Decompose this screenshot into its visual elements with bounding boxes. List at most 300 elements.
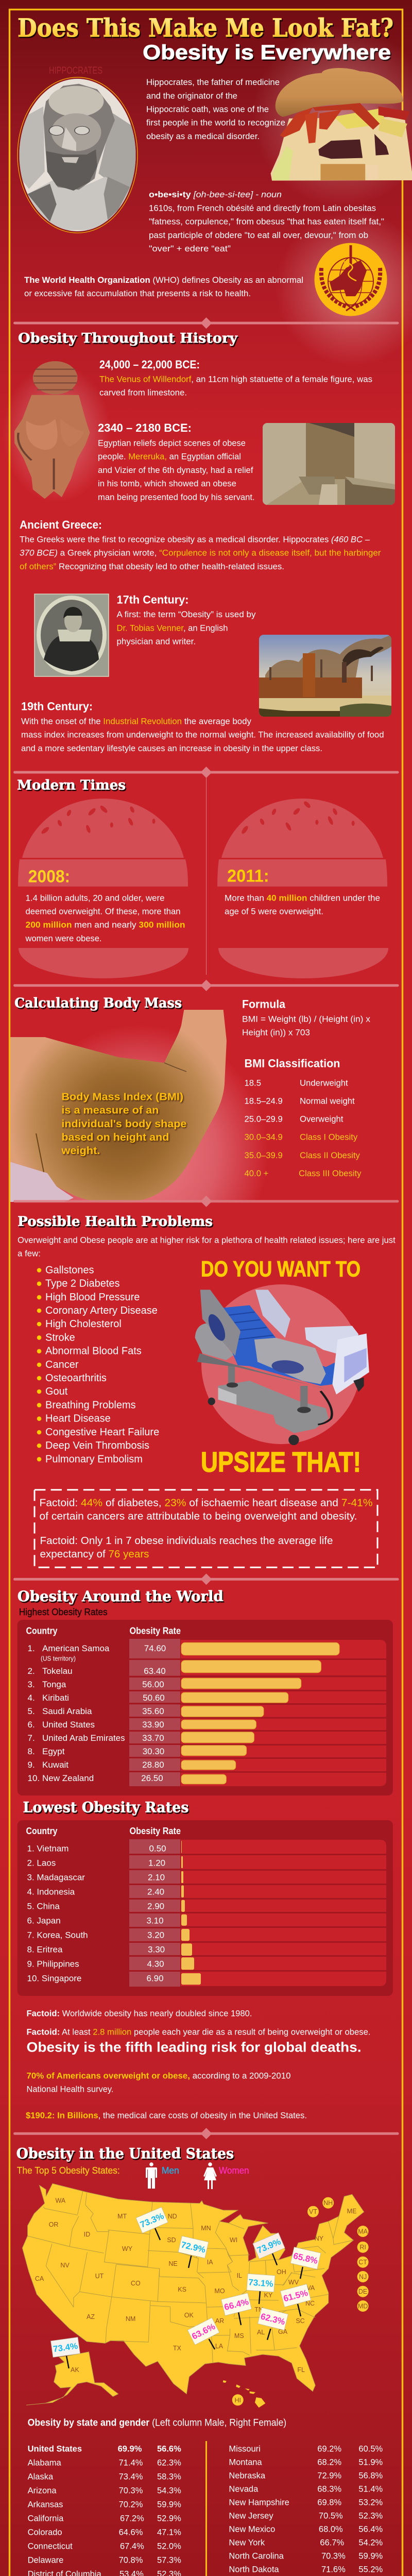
small state circles: CT [358,2259,367,2266]
subtitle: Obesity is Everywhere [143,41,391,64]
table: states Alabama to Mississippi: United States [28,2445,82,2454]
table: states Missouri to Puerto Rico: 53.2% [358,2498,383,2507]
state labels: AR [215,2317,224,2325]
row: New Zealand: 10. [28,1773,40,1783]
entry: 2340 – 2180 BCE: in his tomb, which showed an obese [98,479,236,488]
section: Obesity in the United States [16,2145,387,2576]
small state circles: RI [359,2244,366,2251]
image: loaded burger [271,68,412,181]
intro text: Hippocratic oath, was one of the [146,104,269,114]
row: Tonga: 56.00 [142,1680,164,1689]
state labels: AZ [87,2313,95,2320]
state labels: TN [254,2306,263,2313]
chart: highest obesity rates: Country [26,1626,58,1636]
entry: 17th Century: physician and writer. [116,637,196,647]
table: states Missouri to Puerto Rico: 54.2% [358,2538,383,2548]
row: Kiribati: 50.60 [143,1693,165,1703]
state labels: WV [288,2279,299,2286]
image: industrial revolution factory [259,635,391,717]
entry: 24,000 – 22,000 BCE: carved from limestone. [99,387,187,397]
state labels: IA [207,2259,213,2266]
row: New Zealand: 26.50 [141,1773,163,1783]
sign: Ohio 73.9%: 73.9% [255,2236,282,2256]
image: Venus of Willendorf statuette [14,361,90,499]
row: American Samoa: American Samoa [42,1643,110,1653]
row: Tokelau: 2. [28,1666,35,1676]
table: states Alabama to Mississippi: 70.8% [119,2556,143,2565]
sign: Louisiana 63.6%: 63.6% [190,2321,217,2342]
table: states Missouri to Puerto Rico: 59.9% [358,2552,383,2561]
sign: Mississippi 66.4%: 66.4% [223,2297,250,2312]
row: Philippines: 9. Philippines [27,1959,79,1969]
header [18,13,393,64]
panel: 2011 burger: More than 40 million children under the [225,893,380,903]
row: New Zealand [28,1772,386,1786]
entry: 19th Century [21,700,384,753]
list of health problems: High Blood Pressure [45,1292,140,1303]
table: states Alabama to Mississippi: 67.2% [120,2514,144,2523]
state labels: IL [237,2272,242,2279]
table: states Alabama to Mississippi: 47.1% [157,2528,181,2537]
small state circles: MD [358,2303,368,2310]
BMI classification table: 40.0 + [244,1168,268,1178]
factoids: Obesity is the fifth leading risk for global deaths. [27,2040,362,2055]
state labels: OK [184,2312,194,2319]
row: United States: 33.90 [142,1720,164,1730]
row: American Samoa: 1. [28,1643,35,1653]
row: American Samoa: 74.60 [144,1643,166,1653]
row: Egypt [28,1745,386,1757]
list of health problems: Type 2 Diabetes [45,1278,120,1290]
row: Madagascar: 3. Madagascar [27,1872,85,1882]
entry: Ancient Greece: 370 BCE) a Greek physician wrote, “Corpulence is not only a disease itself, but the harbinger [20,548,381,558]
table: states Missouri to Puerto Rico: 68.2% [317,2458,341,2467]
table: states Alabama to Mississippi: 70.3% [119,2486,143,2496]
intro text: Hippocrates, the father of medicine [146,77,280,87]
callout: Do you want to upsize that: DO YOU WANT TO [201,1257,360,1282]
heading: obesity by state and gender: Obesity by state and gender (Left column Male, Right Female) [28,2417,286,2428]
sign: South Carolina 61.5%: 61.5% [282,2288,309,2303]
section: Obesity Throughout History [3,331,395,753]
state labels: WY [122,2245,133,2252]
row: Singapore: 6.90 [146,1973,164,1983]
panel: 2008 burger [18,799,188,978]
row: Philippines [27,1957,386,1970]
intro text: and the originator of the [146,91,237,100]
small state circles: DE [358,2288,367,2295]
row: Korea, South: 7. Korea, South [27,1930,88,1940]
state labels: SC [296,2317,305,2325]
BMI classification table: Class III Obesity [299,1168,362,1178]
state labels: OR [49,2221,58,2228]
sign: North Dakota 73.3% [136,2207,168,2240]
table: states Missouri to Puerto Rico: Montana [229,2458,262,2467]
small state circles [232,2197,369,2405]
row: Vietnam: 0.50 [149,1843,166,1853]
state labels [35,2197,356,2374]
table: states Alabama to Mississippi: Alaska [28,2472,54,2482]
state labels: CA [35,2275,44,2282]
row: Korea, South [27,1928,386,1941]
BMI description: is a measure of an [61,1105,159,1116]
table: states Alabama to Mississippi: 71.4% [119,2459,143,2468]
BMI classification table: Class I Obesity [300,1132,358,1142]
heading: Modern Times [17,778,126,793]
callout: Do you want to upsize that: UPSIZE THAT! [201,1446,361,1478]
glow behind WHO emblem [276,211,412,366]
panel: 2008 burger: women were obese. [25,934,101,943]
formula: Formula [242,998,286,1011]
list of health problems: Deep Vein Thrombosis [45,1440,149,1451]
definition of obesity: "fatness, corpulence," from obesus "that has eaten itself fat," [149,217,384,227]
table: states Missouri to Puerto Rico: Nebraska [229,2471,266,2481]
table: states Missouri to Puerto Rico: 71.6% [321,2565,346,2574]
icon: man [146,2162,157,2189]
table: states Missouri to Puerto Rico: Missouri [229,2445,261,2454]
row: Tokelau [28,1660,386,1676]
table: states Missouri to Puerto Rico: 69.8% [317,2498,341,2507]
entry: 24,000 – 22,000 BCE [99,358,372,397]
callout: factoids dashed box: Factoid: 44% of diabetes, 23% of ischaemic heart disease and 7-41% [39,1497,373,1509]
panel: 2011 burger: age of 5 were overweight. [225,907,323,917]
BMI description: Body Mass Index (BMI) [61,1092,183,1103]
BMI description [61,1092,186,1157]
row: United States: 6. [28,1720,35,1730]
image: Dr. Tobias Venner portrait [35,594,109,676]
definition of obesity [149,190,384,253]
portrait caption: HIPPOCRATES [49,65,102,76]
BMI classification table: Overweight [300,1114,344,1124]
entry: 19th Century: With the onset of the Industrial Revolution the average body [21,717,252,726]
table: states Alabama to Mississippi: Connecticut [28,2542,73,2551]
definition of obesity: "over" + edere “eat” [149,244,231,253]
intro paragraph: Overweight and Obese people are at higher risk for a plethora of health related issues; here are just [18,1235,396,1245]
small state circles: HI [234,2397,241,2404]
heading: Calculating Body Mass [14,995,182,1011]
table: states Alabama to Mississippi: 52.0% [157,2542,181,2551]
sign: West Virginia 65.8%: 65.8% [293,2251,319,2266]
state labels: SD [167,2236,176,2244]
list of health problems: Congestive Heart Failure [45,1427,159,1438]
list of health problems: Pulmonary Embolism [45,1453,143,1465]
table: states Missouri to Puerto Rico: New York [229,2538,265,2548]
row: United Arab Emirates: 7. [28,1733,35,1743]
list of health problems: Cancer [45,1359,79,1370]
list of health problems: Gallstones [45,1265,94,1276]
row: Tonga: Tonga [42,1680,66,1689]
factoids: Factoid: At least 2.8 million people each year die as a result of being overweight or obese. [27,2027,371,2037]
table: states Missouri to Puerto Rico: 56.8% [358,2471,383,2481]
state labels: AK [71,2366,79,2374]
row: Japan: 6. Japan [27,1916,61,1925]
table: states Alabama to Mississippi: 59.9% [157,2500,181,2510]
table: states Missouri to Puerto Rico: North Carolina [229,2552,284,2561]
callout: factoids dashed box [35,1490,377,1567]
row: Tokelau: Tokelau [42,1666,73,1676]
row: Kiribati: Kiribati [42,1693,69,1703]
panel: 2008 burger: 2008: [28,867,70,887]
entry: 19th Century: and a more sedentary lifestyle causes an increase in obesity in the upper class. [21,743,322,753]
entry: Ancient Greece [20,518,381,571]
chart: lowest obesity rates: Obesity Rate [130,1826,181,1836]
state labels: ME [347,2208,356,2215]
entry: 2340 – 2180 BCE: people. Mereruka, an Egyptian official [98,452,241,462]
state labels: MS [234,2332,244,2340]
state labels: KS [178,2286,186,2293]
entry: 17th Century: A first: the term “Obesity” is used by [116,609,256,619]
state labels: MT [117,2213,127,2220]
BMI description: based on height and [61,1132,169,1143]
heading: Obesity Around the World [18,1588,224,1605]
table: states Alabama to Mississippi: 64.6% [119,2528,143,2537]
icon: WHO emblem [314,243,387,316]
subheading: highest rates: Highest Obesity Rates [19,1607,108,1617]
table: states Missouri to Puerto Rico: New Jersey [229,2512,273,2521]
heading: Obesity Throughout History [18,331,238,346]
small state circles: VT [309,2208,317,2215]
callout: factoids dashed box: Factoid: Only 1 in 7 obese individuals reaches the average life [40,1535,333,1547]
row: Kiribati: 4. [28,1693,35,1703]
entry: 2340 – 2180 BCE [98,421,255,502]
table: states Missouri to Puerto Rico: 56.4% [358,2525,383,2534]
BMI classification table: 25.0–29.9 [244,1114,283,1124]
row: Madagascar: 2.10 [148,1872,165,1882]
section: Calculating Body Mass [10,997,370,1202]
state labels: MN [201,2225,211,2232]
row: China: 5. China [27,1901,60,1911]
sign: West Virginia 65.8% [290,2247,321,2279]
row: Laos: 1.20 [148,1858,165,1868]
row: Japan: 3.10 [146,1916,164,1925]
list of health problems: Heart Disease [45,1413,111,1425]
row: Kuwait: 9. [28,1760,35,1770]
table: states Alabama to Mississippi: 54.3% [157,2486,181,2496]
state labels: NC [305,2300,315,2307]
sign: Alabama 62.3% [258,2308,288,2340]
table: states Alabama to Mississippi: 67.4% [120,2542,144,2551]
definition of obesity: 1610s, from French obésité and directly from Latin obesitas [149,204,376,213]
sign: South Carolina 61.5% [280,2284,311,2316]
row: Laos: 2. Laos [27,1858,56,1868]
formula: Height (in)) x 703 [242,1028,310,1038]
heading: lowest obesity rates: Lowest Obesity Rates [23,1799,188,1816]
table: states Missouri to Puerto Rico: 55.2% [358,2565,383,2574]
small state circles: MA [358,2228,368,2235]
entry: 2340 – 2180 BCE: and Vizier of the 6th dynasty, had a relief [98,465,253,475]
list of health problems: Gout [45,1386,68,1397]
state labels: ID [84,2231,90,2238]
table: states Missouri to Puerto Rico: 69.2% [317,2445,341,2454]
image: obese arm [10,1010,227,1202]
row: Eritrea: 8. Eritrea [27,1944,63,1954]
row: Kuwait: 28.80 [142,1760,164,1770]
state labels: AL [257,2329,265,2336]
small state circles: NJ [359,2273,367,2280]
icon: woman [203,2162,217,2189]
intro text: obesity as a medical disorder. [146,131,260,141]
row: United Arab Emirates [28,1732,386,1744]
portrait: Hippocrates engraving [16,77,139,233]
map legend [17,2162,249,2189]
row: Saudi Arabia: 35.60 [142,1706,164,1716]
BMI classification table: Class II Obesity [300,1150,360,1160]
row: Indonesia: 2.40 [147,1887,164,1896]
sign: Alaska 73.4% [51,2337,80,2368]
BMI description: individual's body shape [61,1118,186,1130]
table: states Missouri to Puerto Rico: 68.0% [319,2525,343,2534]
entry: 2340 – 2180 BCE: 2340 – 2180 BCE: [98,421,192,434]
state labels: CO [131,2280,141,2287]
row: Japan [27,1913,386,1927]
row: Madagascar [27,1870,386,1884]
state labels: ND [168,2213,177,2220]
state labels: OH [277,2268,286,2276]
sign: Alabama 62.3%: 62.3% [260,2311,286,2327]
row: American Samoa [28,1639,386,1662]
map legend: Women [219,2165,249,2176]
state labels: NV [60,2262,70,2269]
callout: factoids dashed box: expectancy of 76 years [40,1549,149,1560]
pink glow behind arm [42,1032,261,1202]
factoids: National Health survey. [27,2084,113,2094]
list of health problems: Coronary Artery Disease [45,1305,158,1316]
sign: Tennessee 73.1% [247,2274,275,2304]
table: states Alabama to Mississippi: 62.3% [157,2459,181,2468]
table: states Alabama to Mississippi: California [28,2514,64,2523]
state labels: TX [173,2345,182,2352]
table: states Alabama to Mississippi: 52.9% [157,2514,181,2523]
table: states Alabama to Mississippi: 56.6% [157,2445,181,2454]
table: states Alabama to Mississippi: 70.2% [119,2500,143,2510]
table: states Missouri to Puerto Rico: 51.4% [358,2485,383,2494]
formula [242,998,371,1038]
row: Korea, South: 3.20 [147,1930,164,1940]
entry: 19th Century: 19th Century: [21,700,93,713]
table: states Alabama to Mississippi: Alabama [28,2459,62,2468]
entry: 2340 – 2180 BCE: man being presented food by his servant. [98,492,255,502]
WHO definition: The World Health Organization (WHO) defines Obesity as an abnormal [24,275,303,285]
table: states Alabama to Mississippi [28,2445,181,2576]
table: states Missouri to Puerto Rico: 52.3% [358,2512,383,2521]
entry: Ancient Greece: The Greeks were the first to recognize obesity as a medical disorder. Hippocrates (460 BC – [20,535,370,545]
BMI classification table: 18.5–24.9 [244,1096,283,1106]
row: Saudi Arabia [28,1704,386,1717]
callout: Do you want to upsize that [195,1257,369,1478]
entry: 17th Century: Dr. Tobias Venner, an English [116,623,228,633]
section: Possible Health Problems [18,1214,396,1567]
table: states Alabama to Mississippi: 58.3% [157,2472,181,2482]
list of health problems: Stroke [45,1332,75,1343]
map legend: The Top 5 Obesity States: [17,2165,120,2176]
row: Eritrea [27,1943,386,1956]
BMI description: weight. [61,1145,100,1157]
section: Modern Times [17,777,388,978]
table: states Missouri to Puerto Rico: 60.5% [358,2445,383,2454]
table: states Missouri to Puerto Rico: New Hampshire [229,2498,289,2507]
WHO definition [24,275,303,298]
sign: Louisiana 63.6% [187,2318,219,2349]
image: bariatric hospital bed [195,1290,369,1445]
row: American Samoa: (US territory) [41,1655,76,1662]
entry: 24,000 – 22,000 BCE: The Venus of Willendorf, an 11cm high statuette of a female figure, was [99,375,372,384]
row: Indonesia: 4. Indonesia [27,1887,75,1896]
entry: 17th Century [116,594,256,647]
list of health problems: Breathing Problems [45,1399,136,1411]
entry: 24,000 – 22,000 BCE: 24,000 – 22,000 BCE: [99,358,200,371]
entry: 17th Century: 17th Century: [116,594,188,606]
panel: 2008 burger: deemed overweight. Of these, more than [26,907,180,917]
map shapes [22,2183,364,2408]
table: states Alabama to Mississippi: Delaware [28,2556,63,2565]
definition of obesity: past participle of obdere "to eat all over, devour," from ob [149,230,368,240]
row: United Arab Emirates: United Arab Emirates [42,1733,125,1743]
row: Kiribati [28,1691,386,1703]
row: Egypt: 8. [28,1747,35,1756]
row: Egypt: Egypt [42,1747,65,1756]
row: Kuwait: Kuwait [42,1760,68,1770]
state labels: KY [264,2292,273,2299]
row: Kuwait [28,1758,386,1771]
state labels: GA [278,2328,288,2335]
row: Indonesia [27,1885,386,1898]
chart: lowest obesity rates [18,1820,393,1996]
row: New Zealand: New Zealand [42,1773,94,1783]
state labels: NM [126,2315,135,2323]
row: Eritrea: 3.30 [148,1944,165,1954]
row: Tokelau: 63.40 [144,1666,166,1676]
row: Saudi Arabia: 5. [28,1706,35,1716]
table: states Missouri to Puerto Rico: 70.3% [321,2552,346,2561]
row: Tonga [28,1677,386,1690]
table: states Alabama to Mississippi: 57.3% [157,2556,181,2565]
column divider [205,2441,207,2576]
panel: 2008 burger: 1.4 billion adults, 20 and older, were [26,893,165,903]
sign: Tennessee 73.1%: 73.1% [248,2277,273,2289]
BMI classification table: Underweight [300,1078,348,1088]
chart: highest obesity rates: Obesity Rate [130,1626,181,1636]
row: Philippines: 4.30 [147,1959,164,1969]
small state circles: NH [323,2199,333,2207]
state labels: NY [315,2235,324,2242]
row: China [27,1900,386,1912]
row: United Arab Emirates: 33.70 [142,1733,164,1743]
table: states Missouri to Puerto Rico: 70.5% [319,2512,343,2521]
WHO definition: or excessive fat accumulation that presents a risk to health. [24,289,251,298]
chart: map of the United States [22,2183,369,2408]
intro paragraph: a few: [18,1249,41,1259]
row: China: 2.90 [147,1901,164,1911]
list of health problems: Abnormal Blood Fats [45,1346,142,1357]
entry: 2340 – 2180 BCE: Egyptian reliefs depict scenes of obese [98,438,246,448]
row: Laos [27,1855,386,1869]
BMI classification table: Normal weight [300,1096,355,1106]
table: states Missouri to Puerto Rico: 51.9% [358,2458,383,2467]
factoids: Factoid: Worldwide obesity has nearly doubled since 1980. [27,2009,252,2019]
image: Egyptian tomb [263,423,395,507]
state labels: UT [95,2273,104,2280]
table: states Alabama to Mississippi: Arkansas [28,2500,63,2510]
sign: North Dakota 73.3%: 73.3% [139,2211,165,2230]
chart: lowest obesity rates: Country [26,1826,58,1836]
table: states Alabama to Mississippi: Arizona [28,2486,57,2496]
state labels: VA [307,2284,315,2292]
heading: Possible Health Problems [18,1214,213,1229]
sign: Alaska 73.4%: 73.4% [53,2341,78,2354]
factoids: $190.2: In Billions, the medical care costs of obesity in the United States. [26,2111,307,2121]
intro text [146,77,285,141]
table: states Missouri to Puerto Rico: Nevada [229,2485,259,2494]
BMI classification table: 35.0–39.9 [244,1150,283,1160]
